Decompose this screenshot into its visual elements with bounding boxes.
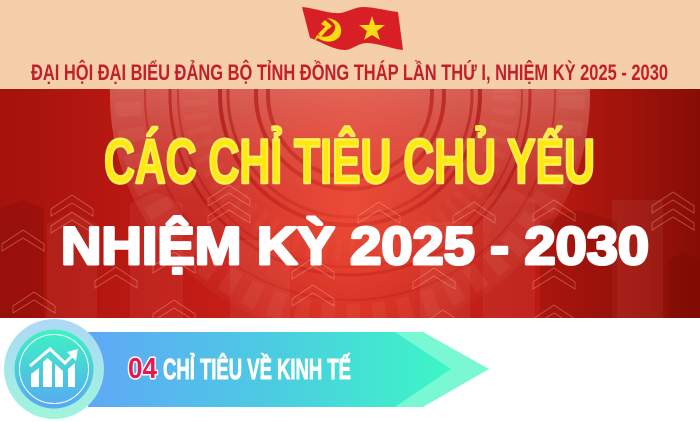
section arrow banner (88, 332, 489, 407)
decorative chevrons (51, 195, 93, 233)
chart bars (31, 358, 75, 387)
icon: growth chart badge (4, 319, 104, 419)
trend arrow (30, 349, 74, 366)
section number: 04 (128, 353, 157, 385)
header band (0, 0, 700, 89)
section title: CHỈ TIÊU VỀ KINH TẾ (163, 352, 351, 386)
decorative buildings (47, 188, 663, 318)
main title line 2: NHIỆM KỲ 2025 - 2030 (61, 215, 649, 276)
banner background (0, 89, 700, 318)
decorative light spot (236, 127, 466, 316)
decorative drum pattern (110, 89, 590, 274)
icon: flag with hammer and sickle and star (302, 7, 403, 50)
